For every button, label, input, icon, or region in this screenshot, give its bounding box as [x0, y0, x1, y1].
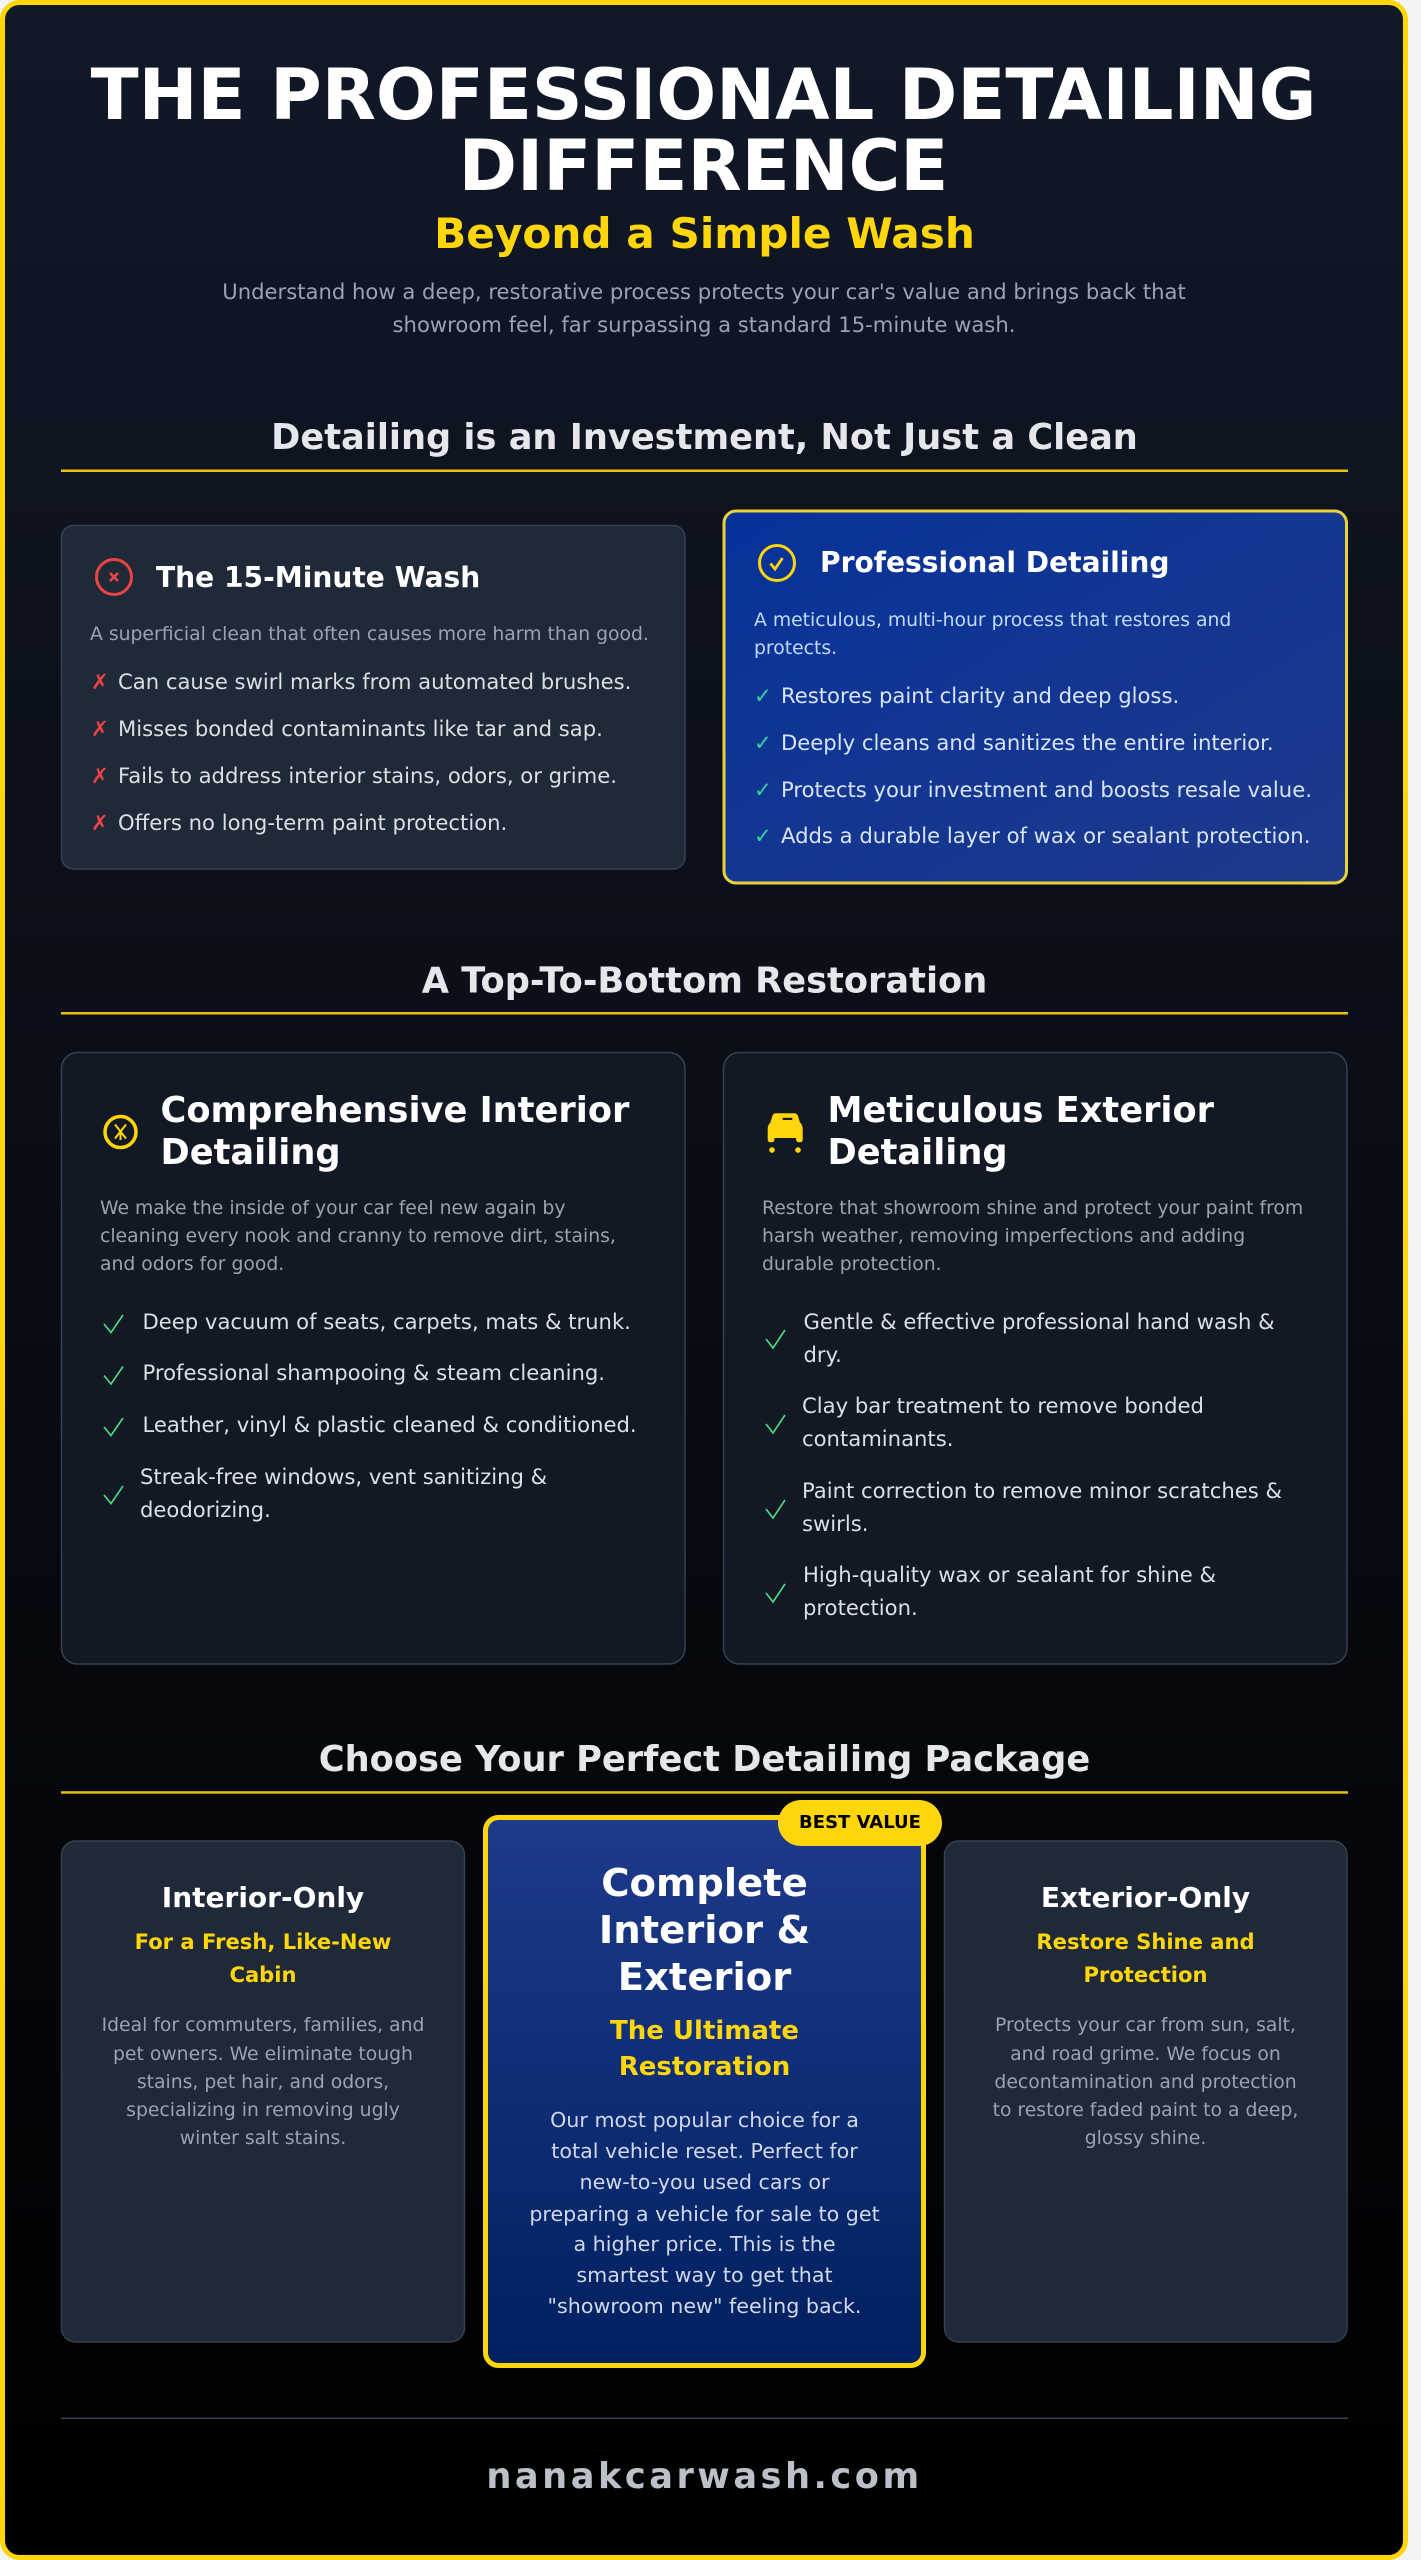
benefit list	[754, 683, 1312, 848]
package name: Exterior-Only	[1041, 1881, 1250, 1914]
card title: Professional Detailing	[820, 546, 1170, 579]
package tagline: Restore Shine and	[1036, 1929, 1255, 1954]
package name: Interior &	[599, 1908, 810, 1953]
package description: glossy shine.	[1085, 2128, 1206, 2149]
interior checklist: Deep vacuum of seats, carpets, mats & trunk.	[142, 1309, 631, 1334]
badge: best value: BEST VALUE	[799, 1812, 921, 1833]
interior checklist: Professional shampooing & steam cleaning.	[142, 1360, 605, 1385]
panel: exterior detailing	[724, 1052, 1347, 1664]
exterior checklist	[766, 1309, 1282, 1620]
section heading: restoration: A Top-To-Bottom Restoration	[422, 960, 987, 1002]
card description: A meticulous, multi-hour process that restores and	[754, 610, 1231, 631]
package name	[599, 1861, 810, 2000]
package description: total vehicle reset. Perfect for	[551, 2139, 858, 2163]
package description: smartest way to get that	[576, 2263, 833, 2287]
card title: Detailing	[828, 1132, 1008, 1173]
header	[91, 54, 1316, 337]
title	[91, 54, 1316, 207]
drawback list: ✗	[91, 810, 109, 835]
package description: Protects your car from sun, salt,	[995, 2015, 1296, 2036]
section heading: investment: Detailing is an Investment, Not Just a Clean	[271, 417, 1138, 458]
package description: new-to-you used cars or	[580, 2170, 830, 2194]
package description: preparing a vehicle for sale to get	[529, 2202, 880, 2226]
interior checklist: Leather, vinyl & plastic cleaned & conditioned.	[142, 1412, 637, 1437]
icon: yellow car	[768, 1113, 803, 1153]
interior checklist: Streak-free windows, vent sanitizing &	[140, 1464, 547, 1489]
package description: specializing in removing ugly	[126, 2100, 400, 2121]
benefit list: ✓	[754, 777, 772, 802]
package name: Complete	[601, 1861, 808, 1906]
package description: stains, pet hair, and odors,	[137, 2072, 389, 2093]
check marks	[104, 1315, 123, 1504]
section heading: packages: Choose Your Perfect Detailing Package	[319, 1739, 1090, 1780]
card description: protects.	[754, 638, 837, 659]
card description: and odors for good.	[100, 1254, 284, 1275]
card title	[160, 1090, 630, 1173]
package description	[993, 2015, 1298, 2149]
benefit list: Adds a durable layer of wax or sealant protection.	[781, 823, 1310, 848]
package tagline	[1036, 1929, 1255, 1987]
icon: interior fan	[105, 1116, 136, 1148]
package tagline: Protection	[1083, 1962, 1208, 1987]
panel: complete package	[486, 1800, 942, 2366]
package description	[102, 2015, 424, 2149]
package name: Interior-Only	[162, 1881, 364, 1914]
exterior checklist: Gentle & effective professional hand wash &	[804, 1309, 1275, 1334]
card description	[100, 1198, 616, 1275]
interior checklist	[104, 1309, 637, 1522]
check marks	[766, 1330, 785, 1602]
exterior checklist: protection.	[803, 1595, 918, 1620]
benefit list: ✓	[754, 823, 772, 848]
card description: durable protection.	[762, 1254, 942, 1275]
package tagline: Cabin	[229, 1962, 297, 1987]
drawback list	[91, 669, 631, 835]
package description: Ideal for commuters, families, and	[102, 2015, 424, 2036]
icon: yellow check circle	[760, 546, 794, 580]
title: DIFFERENCE	[459, 125, 948, 207]
panel: the 15-minute wash	[62, 526, 685, 869]
drawback list: Fails to address interior stains, odors, or grime.	[118, 763, 617, 788]
package tagline: For a Fresh, Like-New	[135, 1929, 391, 1954]
exterior checklist: dry.	[804, 1342, 842, 1367]
benefit list: Deeply cleans and sanitizes the entire interior.	[781, 730, 1274, 755]
benefit list: Protects your investment and boosts resale value.	[781, 777, 1312, 802]
drawback list: Can cause swirl marks from automated brushes.	[118, 669, 631, 694]
footer: nanakcarwash.com	[486, 2456, 923, 2497]
card description: A superficial clean that often causes more harm than good.	[90, 624, 649, 645]
drawback list: ✗	[91, 669, 109, 694]
exterior checklist: High-quality wax or sealant for shine &	[803, 1562, 1216, 1587]
package description: to restore faded paint to a deep,	[993, 2100, 1298, 2121]
subtitle: Beyond a Simple Wash	[434, 209, 975, 258]
drawback list: ✗	[91, 716, 109, 741]
package tagline: Restoration	[619, 2052, 790, 2082]
intro text: Understand how a deep, restorative process protects your car's value and brings back that	[222, 279, 1186, 304]
package name: Exterior	[618, 1955, 791, 2000]
package description: and road grime. We focus on	[1010, 2044, 1281, 2065]
card title: Detailing	[160, 1132, 341, 1173]
card description: cleaning every nook and cranny to remove dirt, stains,	[100, 1226, 616, 1247]
drawback list: Misses bonded contaminants like tar and sap.	[118, 716, 603, 741]
benefit list: ✓	[754, 683, 772, 708]
card description	[762, 1198, 1303, 1275]
package description: decontamination and protection	[994, 2072, 1297, 2093]
card title	[828, 1090, 1215, 1173]
drawback list: ✗	[91, 763, 109, 788]
benefit list: Restores paint clarity and deep gloss.	[781, 683, 1179, 708]
package description	[529, 2108, 880, 2318]
drawback list: Offers no long-term paint protection.	[118, 810, 507, 835]
benefit list: ✓	[754, 730, 772, 755]
package description: winter salt stains.	[180, 2128, 346, 2149]
card description: Restore that showroom shine and protect your paint from	[762, 1198, 1303, 1219]
icon: red cross circle	[96, 560, 132, 594]
panel: exterior-only package	[944, 1841, 1347, 2342]
exterior checklist: contaminants.	[802, 1426, 953, 1451]
interior checklist: deodorizing.	[140, 1497, 271, 1522]
card description	[754, 610, 1231, 659]
package description: "showroom new" feeling back.	[547, 2294, 862, 2318]
card title: Meticulous Exterior	[828, 1090, 1215, 1131]
panel: interior-only package	[62, 1841, 464, 2342]
package tagline: The Ultimate	[610, 2016, 799, 2046]
card title: The 15-Minute Wash	[156, 561, 480, 594]
exterior checklist: Clay bar treatment to remove bonded	[802, 1393, 1204, 1418]
exterior checklist: swirls.	[802, 1511, 868, 1536]
package description: Our most popular choice for a	[550, 2108, 859, 2132]
card title: Comprehensive Interior	[160, 1090, 630, 1131]
intro text: showroom feel, far surpassing a standard 15-minute wash.	[393, 312, 1015, 337]
panel: professional detailing	[724, 511, 1346, 883]
badge: best value	[778, 1800, 942, 1846]
intro text	[222, 279, 1186, 337]
package description: a higher price. This is the	[573, 2232, 836, 2256]
exterior checklist: Paint correction to remove minor scratches &	[802, 1478, 1282, 1503]
panel: interior detailing	[62, 1052, 685, 1664]
package tagline	[610, 2016, 799, 2082]
card description: harsh weather, removing imperfections and adding	[762, 1226, 1245, 1247]
title: THE PROFESSIONAL DETAILING	[91, 54, 1316, 136]
card description: We make the inside of your car feel new again by	[100, 1198, 565, 1219]
package tagline	[135, 1929, 391, 1987]
package description: pet owners. We eliminate tough	[113, 2044, 413, 2065]
